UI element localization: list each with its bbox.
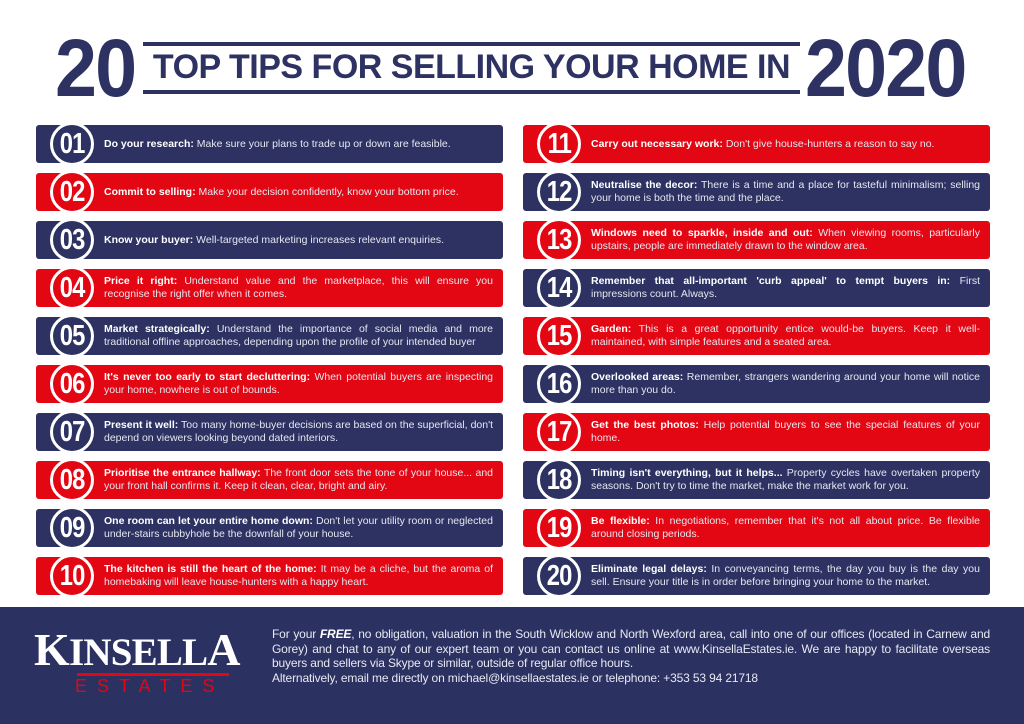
tip 04: Price it right: Understand value and the marketplace, this will ensure you recognise the right offer when it comes. <box>104 275 493 300</box>
tip 12: 12 <box>547 176 571 208</box>
tip 12: Neutralise the decor: There is a time and a place for tasteful minimalism; selling your home is both the time and the place. <box>591 179 980 204</box>
footer <box>0 607 1024 724</box>
tip 01: 01 <box>60 128 84 160</box>
title: TOP TIPS FOR SELLING YOUR HOME IN <box>153 48 790 86</box>
tip 17: Get the best photos: Help potential buyers to see the special features of your home. <box>591 419 980 444</box>
tip 17: 17 <box>547 416 571 448</box>
tip 17 <box>523 413 990 451</box>
tip 18 <box>523 461 990 499</box>
tip 03 <box>36 221 503 259</box>
tip 16: 16 <box>547 368 571 400</box>
contact text: For your FREE, no obligation, valuation in the South Wicklow and North Wexford area, call into one of our offices (located in Carnew and Gorey) and chat to any of our expert team or you can contact us online at www.KinsellaEstates.ie. We are happy to facilitate overseas buyers and sellers via Skype or similar, outside of regular office hours. <box>272 627 990 670</box>
tip 02 <box>36 173 503 211</box>
tip 20: Eliminate legal delays: In conveyancing terms, the day you buy is the day you sell. Ensure your title is in order before bringing your home to the market. <box>591 563 980 588</box>
contact text: Alternatively, email me directly on michael@kinsellaestates.ie or telephone: +353 53 94 21718 <box>272 671 758 685</box>
tip 06 <box>36 365 503 403</box>
logo: Kinsella Estates: KINSELLA <box>34 624 240 675</box>
tip 16 <box>523 365 990 403</box>
tip 14: 14 <box>547 272 571 304</box>
tip 08: 08 <box>60 464 84 496</box>
tip 05: Market strategically: Understand the importance of social media and more traditional offline approaches, depending upon the profile of your intended buyer <box>104 323 493 348</box>
tip 06: 06 <box>60 368 84 400</box>
tip 06: It's never too early to start decluttering: When potential buyers are inspecting your home, nowhere is out of bounds. <box>104 371 493 396</box>
tip 11: Carry out necessary work: Don't give house-hunters a reason to say no. <box>591 138 934 150</box>
tip 19: 19 <box>547 512 571 544</box>
tip 01: Do your research: Make sure your plans to trade up or down are feasible. <box>104 138 451 150</box>
tip 10: The kitchen is still the heart of the home: It may be a cliche, but the aroma of homebaking will leave house-hunters with a happy heart. <box>104 563 493 588</box>
tip 12 <box>523 173 990 211</box>
tip 08 <box>36 461 503 499</box>
tip 13: Windows need to sparkle, inside and out: When viewing rooms, particularly upstairs, people are immediately drawn to the window area. <box>591 227 980 252</box>
tip 10 <box>36 557 503 595</box>
tip 01 <box>36 125 503 163</box>
tip 19 <box>523 509 990 547</box>
tip 04: 04 <box>60 272 84 304</box>
tip 09: One room can let your entire home down: Don't let your utility room or neglected under-stairs cubbyhole be the downfall of your house. <box>104 515 493 540</box>
title: 2020: 2020 <box>805 23 965 114</box>
tip 15 <box>523 317 990 355</box>
tip 11 <box>523 125 990 163</box>
tip 03: Know your buyer: Well-targeted marketing increases relevant enquiries. <box>104 234 444 246</box>
tip 19: Be flexible: In negotiations, remember that it's not all about price. Be flexible around closing periods. <box>591 515 980 540</box>
title: 20: 20 <box>55 23 135 114</box>
tip 07: 07 <box>60 416 84 448</box>
tip 15: Garden: This is a great opportunity entice would-be buyers. Keep it well-maintained, with simple features and a seated area. <box>591 323 980 348</box>
tip 10: 10 <box>60 560 84 592</box>
tip 05 <box>36 317 503 355</box>
tip 13 <box>523 221 990 259</box>
tip 09: 09 <box>60 512 84 544</box>
tip 02: Commit to selling: Make your decision confidently, know your bottom price. <box>104 186 459 198</box>
tip 20 <box>523 557 990 595</box>
tip 07: Present it well: Too many home-buyer decisions are based on the superficial, don't depend on viewers looking beyond dated interiors. <box>104 419 493 444</box>
tip 05: 05 <box>60 320 84 352</box>
tip 13: 13 <box>547 224 571 256</box>
tip 14 <box>523 269 990 307</box>
tip 18: 18 <box>547 464 571 496</box>
tip 15: 15 <box>547 320 571 352</box>
tip 08: Prioritise the entrance hallway: The front door sets the tone of your house... and your front hall confirms it. Keep it clean, clear, bright and airy. <box>104 467 493 492</box>
logo: Kinsella Estates: ESTATES <box>75 676 224 696</box>
tip 07 <box>36 413 503 451</box>
tip 20: 20 <box>547 560 571 592</box>
tip 11: 11 <box>547 128 571 160</box>
tip 16: Overlooked areas: Remember, strangers wandering around your home will notice more than you do. <box>591 371 980 396</box>
tip 02: 02 <box>60 176 84 208</box>
tip 04 <box>36 269 503 307</box>
tip 03: 03 <box>60 224 84 256</box>
tip 14: Remember that all-important 'curb appeal' to tempt buyers in: First impressions count. Always. <box>591 275 980 300</box>
tip 18: Timing isn't everything, but it helps... Property cycles have overtaken property seasons. Don't try to time the market, make the market work for you. <box>591 467 980 492</box>
tip 09 <box>36 509 503 547</box>
